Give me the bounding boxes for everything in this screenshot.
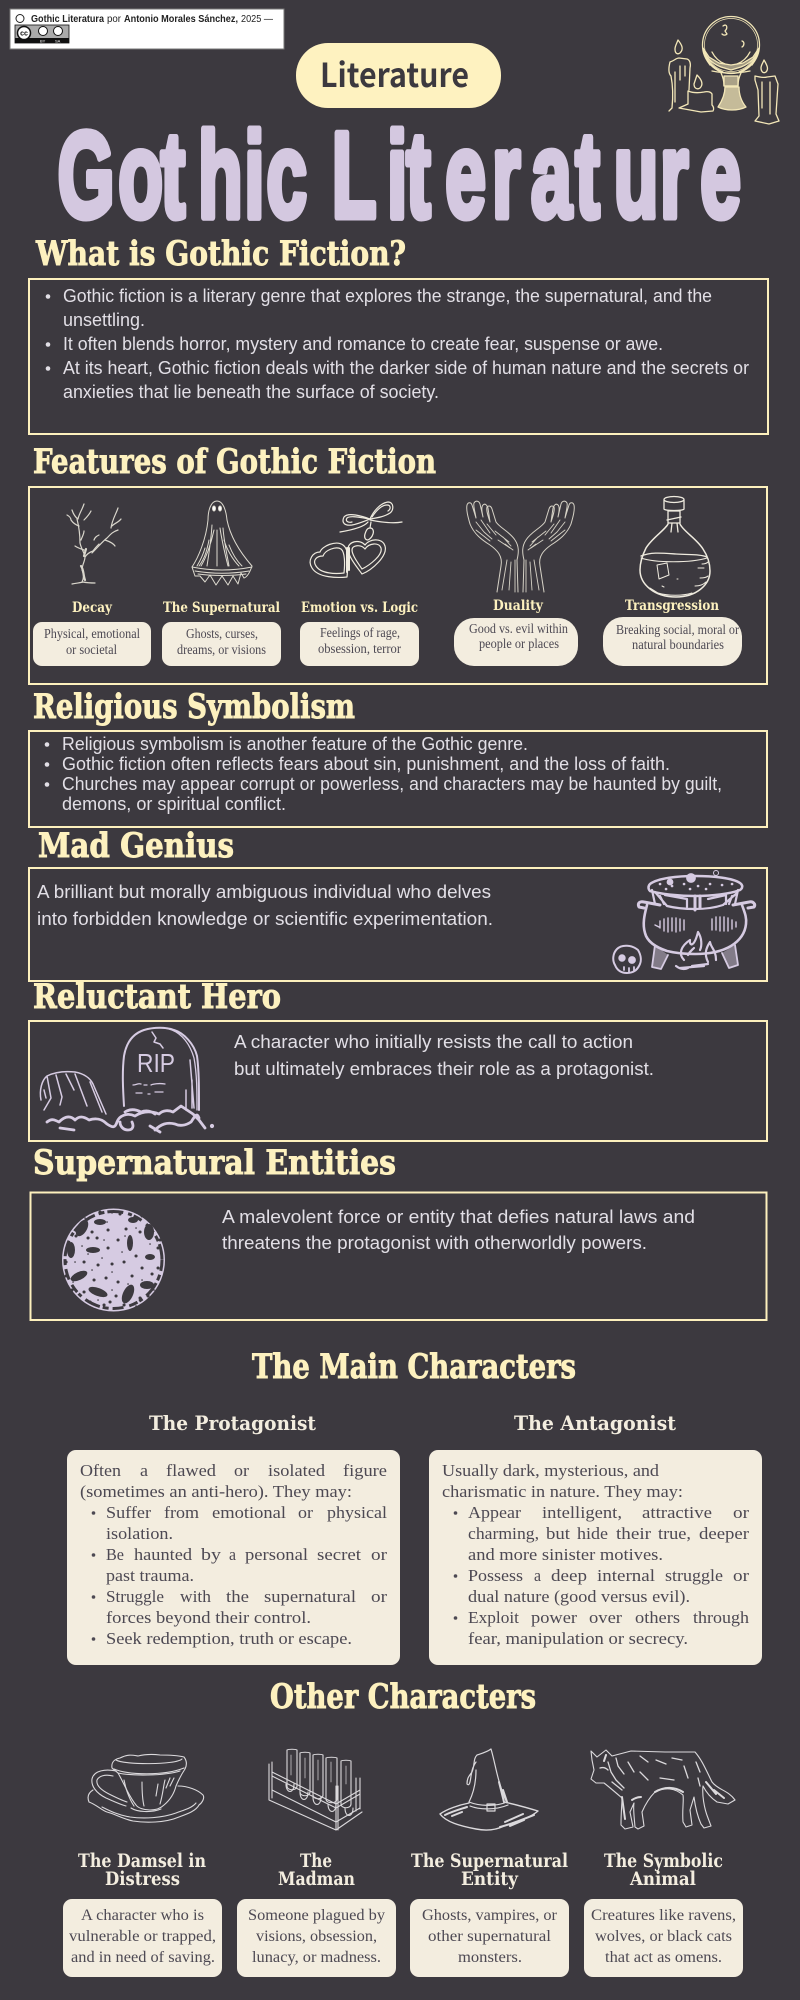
- label: the symbolic animal: The Symbolic: [604, 1850, 723, 1872]
- icon: tombstone and skeletal hand: [40, 1028, 213, 1132]
- icon: heart locket: [310, 502, 402, 577]
- card: duality: people or places: [479, 636, 559, 651]
- icon: open hands: [467, 501, 574, 592]
- card: the protagonist: Often: [80, 1461, 121, 1480]
- card: supernatural entity: [410, 1899, 569, 1977]
- heading: other characters: Other Characters: [270, 1677, 536, 1717]
- panel: supernatural entities: threatens the protagonist with otherworldly powers.: [222, 1233, 647, 1253]
- card: the protagonist: from: [164, 1503, 199, 1522]
- card: the antagonist: Exploit: [468, 1608, 519, 1627]
- card: the protagonist: isolation.: [106, 1524, 173, 1543]
- label: supernatural: The Supernatural: [163, 600, 280, 616]
- label: the symbolic animal: Animal: [629, 1868, 696, 1890]
- card: the antagonist: but: [546, 1524, 570, 1543]
- icon: ghost: [192, 501, 252, 585]
- card: the protagonist: physical: [327, 1503, 387, 1522]
- label: the damsel in distress: [78, 1850, 206, 1890]
- card: the antagonist: hide: [577, 1524, 608, 1543]
- card: damsel: and in need of saving.: [71, 1949, 215, 1966]
- icon: full moon: [62, 1208, 165, 1312]
- license notice: [10, 9, 284, 49]
- label: the supernatural entity: The Supernatural: [411, 1850, 568, 1872]
- card: the protagonist: a: [140, 1461, 149, 1480]
- icon: witch hat: [440, 1749, 538, 1830]
- panel: features of gothic fiction: [29, 487, 767, 684]
- label: the damsel in distress: The Damsel in: [78, 1850, 206, 1872]
- card: the antagonist: [429, 1450, 762, 1665]
- card: the antagonist: attractive: [642, 1503, 712, 1522]
- card: symbolic animal: [584, 1899, 743, 1977]
- panel: what is gothic fiction: [29, 279, 768, 434]
- card: transgression: Breaking social, moral or: [616, 622, 739, 637]
- card: emotion: Feelings of rage,: [320, 625, 400, 640]
- card: the protagonist: figure: [343, 1461, 387, 1480]
- card: the antagonist: through: [693, 1608, 750, 1627]
- card: decay: [33, 622, 151, 666]
- heading: mad genius: Mad Genius: [38, 826, 234, 866]
- card: the protagonist: haunted: [134, 1545, 193, 1564]
- title: Gothic Literature: [58, 108, 741, 244]
- label: the madman: The: [300, 1850, 332, 1872]
- card: the protagonist: the: [226, 1587, 249, 1606]
- label: decay: Decay: [72, 600, 113, 616]
- panel: religious symbolism: Gothic fiction often reflects fears about sin, punishment, and the loss of faith.: [62, 754, 670, 774]
- card: supernatural: [162, 622, 281, 666]
- panel: religious symbolism: demons, or spiritual conflict.: [62, 794, 286, 814]
- panel: what is gothic fiction: It often blends horror, mystery and romance to create fear, suspense or awe.: [63, 334, 663, 354]
- heading: the main characters: The Main Characters: [252, 1347, 576, 1387]
- card: the protagonist: personal: [245, 1545, 308, 1564]
- license notice: SA: [55, 38, 61, 43]
- card: the antagonist: or: [733, 1566, 750, 1585]
- card: the antagonist: Usually dark, mysterious, and: [442, 1461, 660, 1480]
- label: the symbolic animal: [604, 1850, 723, 1890]
- category pill: Literature: [320, 49, 469, 97]
- card: decay: or societal: [66, 642, 117, 657]
- panel: what is gothic fiction: At its heart, Gothic fiction deals with the darker side of human nature and the secrets or: [63, 358, 749, 378]
- license notice: 2025 —: [241, 13, 273, 25]
- label: the madman: Madman: [278, 1868, 355, 1890]
- card: the antagonist: struggle: [665, 1566, 723, 1585]
- card: damsel: vulnerable or trapped,: [69, 1928, 216, 1945]
- card: the protagonist: Be: [106, 1545, 124, 1564]
- card: emotion: obsession, terror: [318, 641, 401, 656]
- card: the protagonist: isolated: [268, 1461, 326, 1480]
- card: the protagonist: forces beyond their control.: [106, 1608, 311, 1627]
- panel: reluctant hero: A character who initially resists the call to action: [234, 1032, 633, 1052]
- card: the antagonist: intelligent,: [542, 1503, 622, 1522]
- panel: religious symbolism: Religious symbolism is another feature of the Gothic genre.: [62, 734, 528, 754]
- card: emotion: [300, 622, 419, 666]
- heading: religious symbolism: Religious Symbolism: [33, 687, 355, 727]
- label: the damsel in distress: Distress: [105, 1868, 180, 1890]
- card: madman: visions, obsession,: [256, 1928, 377, 1945]
- card: the protagonist: Suffer: [106, 1503, 152, 1522]
- panel: religious symbolism: [29, 731, 767, 827]
- card: symbolic animal: that act as omens.: [605, 1949, 722, 1966]
- heading: supernatural entities: Supernatural Entities: [33, 1143, 396, 1183]
- category pill: [296, 43, 501, 108]
- card: madman: Someone plagued by: [248, 1907, 385, 1924]
- panel: supernatural entities: A malevolent force or entity that defies natural laws and: [222, 1207, 695, 1227]
- panel: reluctant hero: [29, 1021, 767, 1141]
- card: the antagonist: their: [616, 1524, 652, 1543]
- heading: what is gothic fiction: What is Gothic Fiction?: [35, 234, 406, 274]
- icon: cauldron: [613, 870, 755, 973]
- card: the protagonist: [67, 1450, 400, 1665]
- card: the antagonist: others: [635, 1608, 680, 1627]
- card: the antagonist: power: [531, 1608, 578, 1627]
- card: madman: [237, 1899, 396, 1977]
- icon: tombstone and skeletal hand: RIP: [137, 1048, 175, 1078]
- card: damsel: [63, 1899, 222, 1977]
- license notice: Antonio Morales Sánchez,: [124, 13, 238, 25]
- card: the protagonist: secret: [317, 1545, 361, 1564]
- card: the antagonist: charming,: [468, 1524, 539, 1543]
- card: duality: Good vs. evil within: [469, 621, 568, 636]
- card: the antagonist: deeper: [699, 1524, 750, 1543]
- panel: mad genius: into forbidden knowledge or scientific experimentation.: [37, 909, 493, 929]
- card: the antagonist: deep: [551, 1566, 587, 1585]
- card: decay: Physical, emotional: [44, 626, 140, 641]
- card: the antagonist: Appear: [468, 1503, 522, 1522]
- card: the protagonist: with: [180, 1587, 212, 1606]
- panel: mad genius: [29, 868, 767, 981]
- panel: what is gothic fiction: unsettling.: [63, 310, 145, 330]
- icon: test tube rack: [269, 1749, 362, 1830]
- card: the antagonist: over: [589, 1608, 623, 1627]
- panel: what is gothic fiction: anxieties that lie beneath the surface of society.: [63, 382, 439, 402]
- panel: what is gothic fiction: Gothic fiction is a literary genre that explores the strange, the supernatural, and the: [63, 286, 712, 306]
- card: the protagonist: by: [201, 1545, 222, 1564]
- panel: religious symbolism: Churches may appear corrupt or powerless, and characters may be haunted by guilt,: [62, 774, 722, 794]
- label: transgression: Transgression: [625, 598, 719, 614]
- card: the antagonist: charismatic in nature. They may:: [442, 1482, 683, 1501]
- heading: reluctant hero: Reluctant Hero: [33, 977, 281, 1017]
- card: the antagonist: a: [534, 1566, 542, 1585]
- label: duality: Duality: [493, 598, 544, 614]
- card: the protagonist: emotional: [212, 1503, 286, 1522]
- card: the antagonist: or: [733, 1503, 750, 1522]
- card: the protagonist: or: [298, 1503, 314, 1522]
- card: the protagonist: past trauma.: [106, 1566, 194, 1585]
- panel: supernatural entities: [30, 1192, 766, 1320]
- card: the antagonist: dual nature (good versus evil).: [468, 1587, 690, 1606]
- card: supernatural: Ghosts, curses,: [186, 626, 258, 641]
- panel: mad genius: A brilliant but morally ambiguous individual who delves: [37, 882, 491, 902]
- card: duality: [454, 618, 578, 666]
- heading: the antagonist: The Antagonist: [514, 1411, 677, 1435]
- license notice: Gothic Literatura: [31, 13, 104, 25]
- card: symbolic animal: Creatures like ravens,: [591, 1907, 736, 1924]
- card: symbolic animal: wolves, or black cats: [595, 1928, 732, 1945]
- icon: wolf: [591, 1750, 735, 1829]
- card: the antagonist: Possess: [468, 1566, 523, 1585]
- card: madman: lunacy, or madness.: [252, 1949, 381, 1966]
- license notice: BY: [40, 38, 46, 43]
- card: the protagonist: or: [371, 1545, 388, 1564]
- label: the supernatural entity: Entity: [461, 1868, 519, 1890]
- card: the antagonist: true,: [658, 1524, 691, 1543]
- icon: teacup: [88, 1754, 204, 1822]
- card: the protagonist: flawed: [166, 1461, 217, 1480]
- icon: bare tree: [67, 504, 121, 584]
- card: the protagonist: Struggle: [106, 1587, 164, 1606]
- icon: potion bottle: [640, 496, 710, 597]
- heading: the protagonist: The Protagonist: [149, 1411, 317, 1435]
- license notice: por: [107, 13, 121, 25]
- card: the protagonist: Seek redemption, truth or escape.: [106, 1629, 352, 1648]
- card: the antagonist: and more sinister motives.: [468, 1545, 663, 1564]
- icon: crystal ball and candles: [669, 16, 779, 124]
- card: transgression: natural boundaries: [632, 637, 724, 652]
- card: the protagonist: supernatural: [264, 1587, 356, 1606]
- card: supernatural entity: other supernatural: [428, 1928, 552, 1945]
- card: the antagonist: fear, manipulation or secrecy.: [468, 1629, 688, 1648]
- card: supernatural entity: Ghosts, vampires, or: [422, 1907, 558, 1924]
- card: the antagonist: internal: [597, 1566, 655, 1585]
- card: the protagonist: a: [229, 1545, 237, 1564]
- card: the protagonist: or: [371, 1587, 388, 1606]
- license notice: cc: [20, 30, 28, 38]
- label: the supernatural entity: [411, 1850, 568, 1890]
- heading: features: Features of Gothic Fiction: [33, 442, 436, 482]
- label: emotion vs logic: Emotion vs. Logic: [301, 600, 418, 616]
- card: supernatural entity: monsters.: [458, 1949, 522, 1966]
- label: the madman: [278, 1850, 355, 1890]
- card: transgression: [603, 617, 742, 666]
- card: damsel: A character who is: [81, 1907, 204, 1924]
- card: supernatural: dreams, or visions: [177, 642, 266, 657]
- card: the protagonist: (sometimes an anti-hero). They may:: [80, 1482, 352, 1501]
- panel: reluctant hero: but ultimately embraces their role as a protagonist.: [234, 1059, 654, 1079]
- card: the protagonist: or: [234, 1461, 250, 1480]
